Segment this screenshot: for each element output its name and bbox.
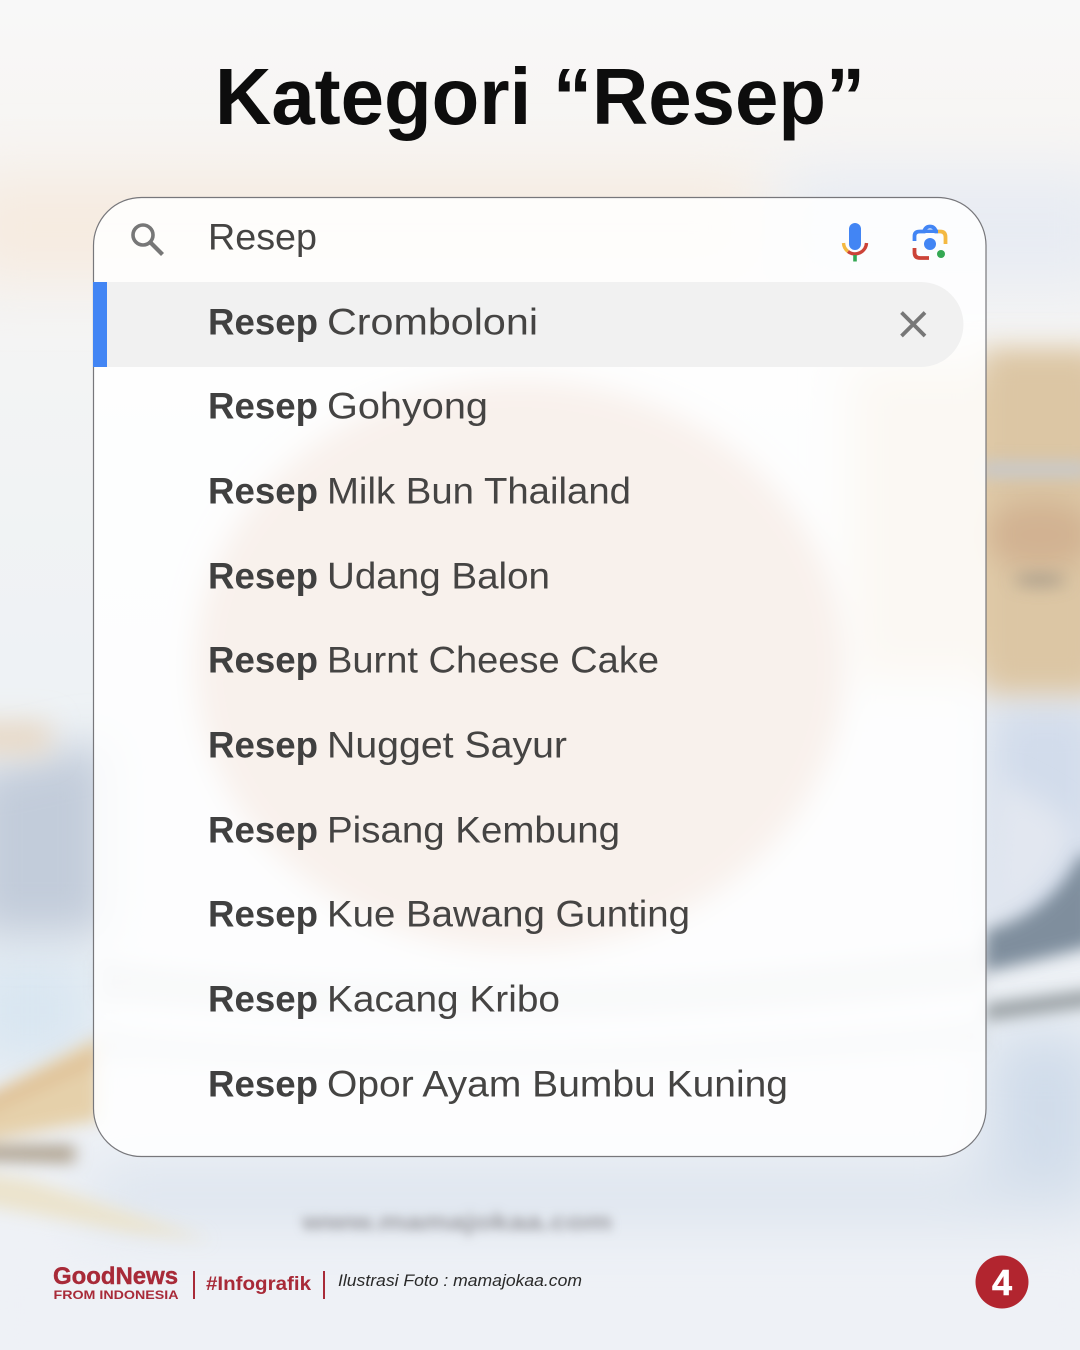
hashtag: Infografik: #Infografik: [206, 1273, 311, 1295]
suggestion: Resep Kue Bawang Gunting: Resep: [208, 894, 318, 934]
icon: close: [902, 312, 925, 336]
suggestion: Resep Burnt Cheese Cake: Resep: [208, 640, 318, 680]
page number badge: 4: [992, 1262, 1012, 1303]
footer: [53, 1256, 1028, 1308]
blue selection bar: [93, 282, 107, 367]
photo credit: Ilustrasi Foto : mamajokaa.com: [338, 1271, 582, 1290]
suggestion: Resep Nugget Sayur: Resep: [208, 724, 318, 766]
suggestion: Resep Pisang Kembung: Pisang Kembung: [327, 810, 620, 850]
suggestion: Resep Milk Bun Thailand: Resep: [208, 470, 318, 512]
icon: search magnifier: [133, 225, 162, 254]
suggestion: Resep Burnt Cheese Cake: Burnt Cheese Cake: [327, 640, 659, 680]
icon: camera lens: [914, 226, 946, 258]
suggestion: Resep Pisang Kembung: Resep: [208, 810, 318, 850]
suggestion: Resep Cromboloni: Cromboloni: [327, 302, 538, 342]
search query text: Resep: [208, 216, 317, 258]
blurred watermark: www.mamajokaa.com: [301, 1209, 612, 1236]
icon: microphone: [844, 223, 866, 262]
page number badge: [976, 1256, 1028, 1308]
suggestion: Resep Opor Ayam Bumbu Kuning: Resep: [208, 1064, 318, 1104]
suggestion: Resep Udang Balon: Udang Balon: [327, 556, 550, 596]
suggestion: Resep Milk Bun Thailand: [208, 470, 631, 512]
suggestion: Resep Gohyong: Resep: [208, 386, 318, 426]
suggestion: Resep Gohyong: Gohyong: [327, 386, 488, 426]
suggestion: Resep Kacang Kribo: Kacang Kribo: [327, 978, 560, 1020]
suggestion: Resep Nugget Sayur: Nugget Sayur: [327, 724, 567, 766]
logo: GoodNews from Indonesia: FROM INDONESIA: [54, 1288, 179, 1302]
suggestion: Resep Kue Bawang Gunting: Kue Bawang Gunting: [327, 894, 690, 934]
suggestion: Resep Udang Balon: [208, 556, 550, 596]
logo: GoodNews from Indonesia: [53, 1263, 179, 1302]
title: Kategori “Resep”: [215, 52, 865, 141]
suggestion: Resep Udang Balon: Resep: [208, 556, 318, 596]
highlighted row: [93, 282, 963, 367]
logo: GoodNews from Indonesia: GoodNews: [53, 1263, 178, 1290]
suggestion: Resep Kacang Kribo: [208, 978, 560, 1020]
suggestion: Resep Milk Bun Thailand: Milk Bun Thailand: [327, 470, 631, 512]
panel: search box: [93, 198, 986, 1156]
suggestion: Resep Cromboloni: Resep: [208, 302, 318, 342]
suggestion: Resep Nugget Sayur: [208, 724, 567, 766]
suggestion: Resep Gohyong: [208, 386, 488, 426]
suggestion: Resep Opor Ayam Bumbu Kuning: Opor Ayam Bumbu Kuning: [327, 1064, 788, 1104]
suggestion: Resep Pisang Kembung: [208, 810, 620, 850]
suggestion: Resep Kacang Kribo: Resep: [208, 978, 318, 1020]
hashtag: Infografik: [193, 1271, 325, 1299]
suggestion: Resep Cromboloni: [208, 302, 538, 342]
